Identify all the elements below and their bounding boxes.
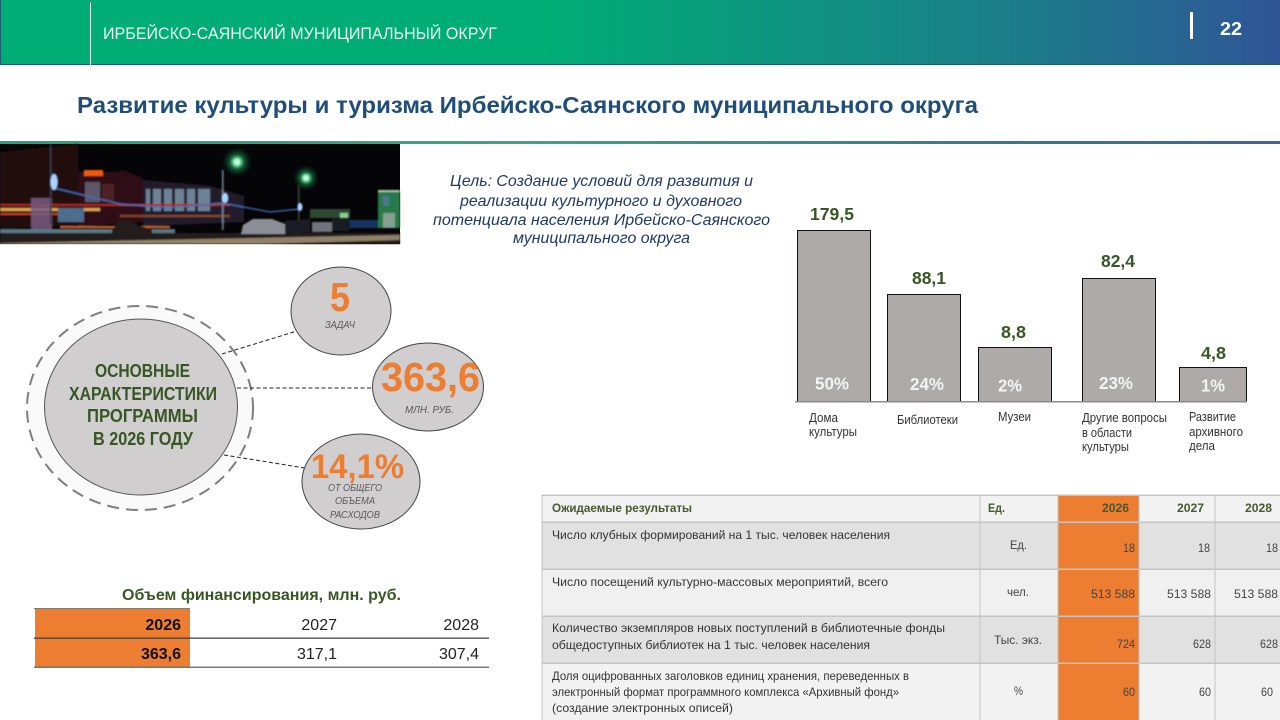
- title underline: [0, 141, 1280, 144]
- row: library: Тыс. экз.: [994, 633, 1042, 647]
- bar: Другие вопросы: культуры: [1082, 440, 1129, 454]
- goal text: муниципального округа: [513, 230, 690, 247]
- table header: 2027: [1177, 501, 1204, 515]
- row: library: Количество экземпляров новых поступлений в библиотечные фонды: [552, 621, 945, 635]
- row: visits: Число посещений культурно-массовых мероприятий, всего: [552, 575, 888, 589]
- bar: Музеи: 2%: [998, 376, 1022, 396]
- bar: Дома культуры: Дома: [809, 411, 838, 425]
- row: archive: %: [1014, 684, 1023, 698]
- bar: Музеи: [978, 322, 1052, 424]
- photo: night street with building: [0, 144, 400, 244]
- center circle: ХАРАКТЕРИСТИКИ: [69, 384, 217, 404]
- bar: Развитие архивного дела: 4,8: [1201, 343, 1226, 363]
- goal text: реализации культурного и духовного: [459, 193, 742, 210]
- row: visits: 513 588: [1091, 587, 1135, 601]
- page number: [1190, 12, 1242, 39]
- row: archive: [552, 669, 1273, 715]
- bar: Библиотеки: [888, 268, 960, 427]
- row: clubs: 18: [1198, 541, 1210, 555]
- row: library: общедоступных библиотек на 1 тыс. человек населения: [552, 638, 870, 652]
- table header: 2028: [1245, 501, 1272, 515]
- bar: Библиотеки: 88,1: [912, 268, 946, 288]
- bar: Другие вопросы: [1082, 251, 1167, 454]
- row: clubs: Число клубных формирований на 1 тыс. человек населения: [552, 528, 890, 542]
- title: Развитие культуры и туризма Ирбейско-Саянского муниципального округа: [77, 92, 979, 118]
- center circle: ОСНОВНЫЕ: [95, 361, 190, 381]
- row: archive: 60: [1261, 685, 1273, 699]
- goal text: [433, 173, 770, 247]
- bar: Развитие архивного дела: архивного: [1189, 425, 1243, 439]
- circle: 5 tasks: ЗАДАЧ: [325, 320, 355, 331]
- page number: 22: [1220, 19, 1242, 39]
- bar: Развитие архивного дела: [1180, 343, 1246, 453]
- bar: Другие вопросы: 82,4: [1101, 251, 1135, 271]
- bar: Развитие архивного дела: 1%: [1201, 376, 1225, 396]
- circle: 363,6 mln rub: [372, 343, 484, 431]
- bar: Библиотеки: 24%: [910, 374, 944, 394]
- financing table: 2027: [301, 617, 337, 634]
- table header: [552, 501, 1272, 515]
- circle: 363,6 mln rub: МЛН. РУБ.: [405, 405, 454, 416]
- circle: 14,1%: [302, 434, 420, 529]
- bar: Музеи: Музеи: [998, 410, 1031, 424]
- center circle: ПРОГРАММЫ: [87, 406, 198, 426]
- financing table: 317,1: [297, 646, 337, 663]
- row: visits: чел.: [1007, 585, 1029, 599]
- financing table: 363,6: [141, 646, 181, 663]
- bar: Дома культуры: [798, 204, 870, 439]
- row: visits: [552, 575, 1278, 601]
- bar: Другие вопросы: в области: [1082, 426, 1132, 440]
- bar: Музеи: 8,8: [1001, 322, 1026, 342]
- center circle: [44, 319, 238, 495]
- row: archive: 60: [1123, 685, 1135, 699]
- expected results table: [542, 494, 1280, 720]
- header text: ИРБЕЙСКО-САЯНСКИЙ МУНИЦИПАЛЬНЫЙ ОКРУГ: [103, 24, 497, 43]
- row: archive: (создание электронных описей): [552, 701, 733, 715]
- goal text: Цель: Создание условий для развития и: [450, 173, 753, 190]
- bar chart: [795, 204, 1247, 454]
- row: archive: электронный формат программного комплекса «Архивный фонд»: [552, 685, 899, 699]
- bar: Библиотеки: Библиотеки: [897, 413, 958, 427]
- circle: 5 tasks: 5: [330, 274, 350, 320]
- row: visits: 513 588: [1234, 587, 1278, 601]
- row: library: 724: [1117, 637, 1135, 651]
- bar: Дома культуры: 179,5: [810, 204, 854, 224]
- row: visits: 513 588: [1167, 587, 1211, 601]
- table header: 2026: [1102, 501, 1129, 515]
- table header: Ед.: [988, 501, 1005, 515]
- bar: Другие вопросы: 23%: [1099, 373, 1133, 393]
- row: library: 628: [1193, 637, 1211, 651]
- bar: Другие вопросы: Другие вопросы: [1082, 411, 1167, 425]
- financing table: 2026: [145, 617, 181, 634]
- row: clubs: [552, 528, 1278, 555]
- row: library: [552, 621, 1278, 652]
- bar: Дома культуры: 50%: [815, 374, 849, 394]
- financing heading: Объем финансирования, млн. руб.: [122, 587, 401, 604]
- financing table: 2028: [443, 617, 479, 634]
- circle: 14,1%: 14,1%: [311, 448, 404, 486]
- main characteristics diagram: [27, 267, 484, 529]
- bar: Развитие архивного дела: Развитие: [1189, 410, 1236, 424]
- bar: Развитие архивного дела: дела: [1189, 439, 1215, 453]
- header banner: [0, 0, 1280, 65]
- circle: 14,1%: ОТ ОБЩЕГО: [328, 483, 382, 494]
- circle: 14,1%: ОБЪЕМА: [335, 496, 375, 507]
- financing table: 307,4: [439, 646, 479, 663]
- circle: 363,6 mln rub: 363,6: [381, 354, 480, 400]
- financing table: [34, 587, 489, 668]
- goal text: потенциала населения Ирбейско-Саянского: [433, 212, 770, 229]
- center circle: В 2026 ГОДУ: [93, 429, 194, 449]
- row: archive: 60: [1199, 685, 1211, 699]
- row: archive: Доля оцифрованных заголовков единиц хранения, переведенных в: [552, 669, 909, 683]
- circle: 5 tasks: [291, 267, 391, 355]
- row: clubs: Ед.: [1010, 538, 1027, 552]
- circle: 14,1%: РАСХОДОВ: [330, 510, 380, 521]
- row: clubs: 18: [1266, 541, 1278, 555]
- row: library: 628: [1260, 637, 1278, 651]
- bar: Дома культуры: культуры: [809, 425, 857, 439]
- row: clubs: 18: [1123, 541, 1135, 555]
- table header: Ожидаемые результаты: [552, 501, 692, 515]
